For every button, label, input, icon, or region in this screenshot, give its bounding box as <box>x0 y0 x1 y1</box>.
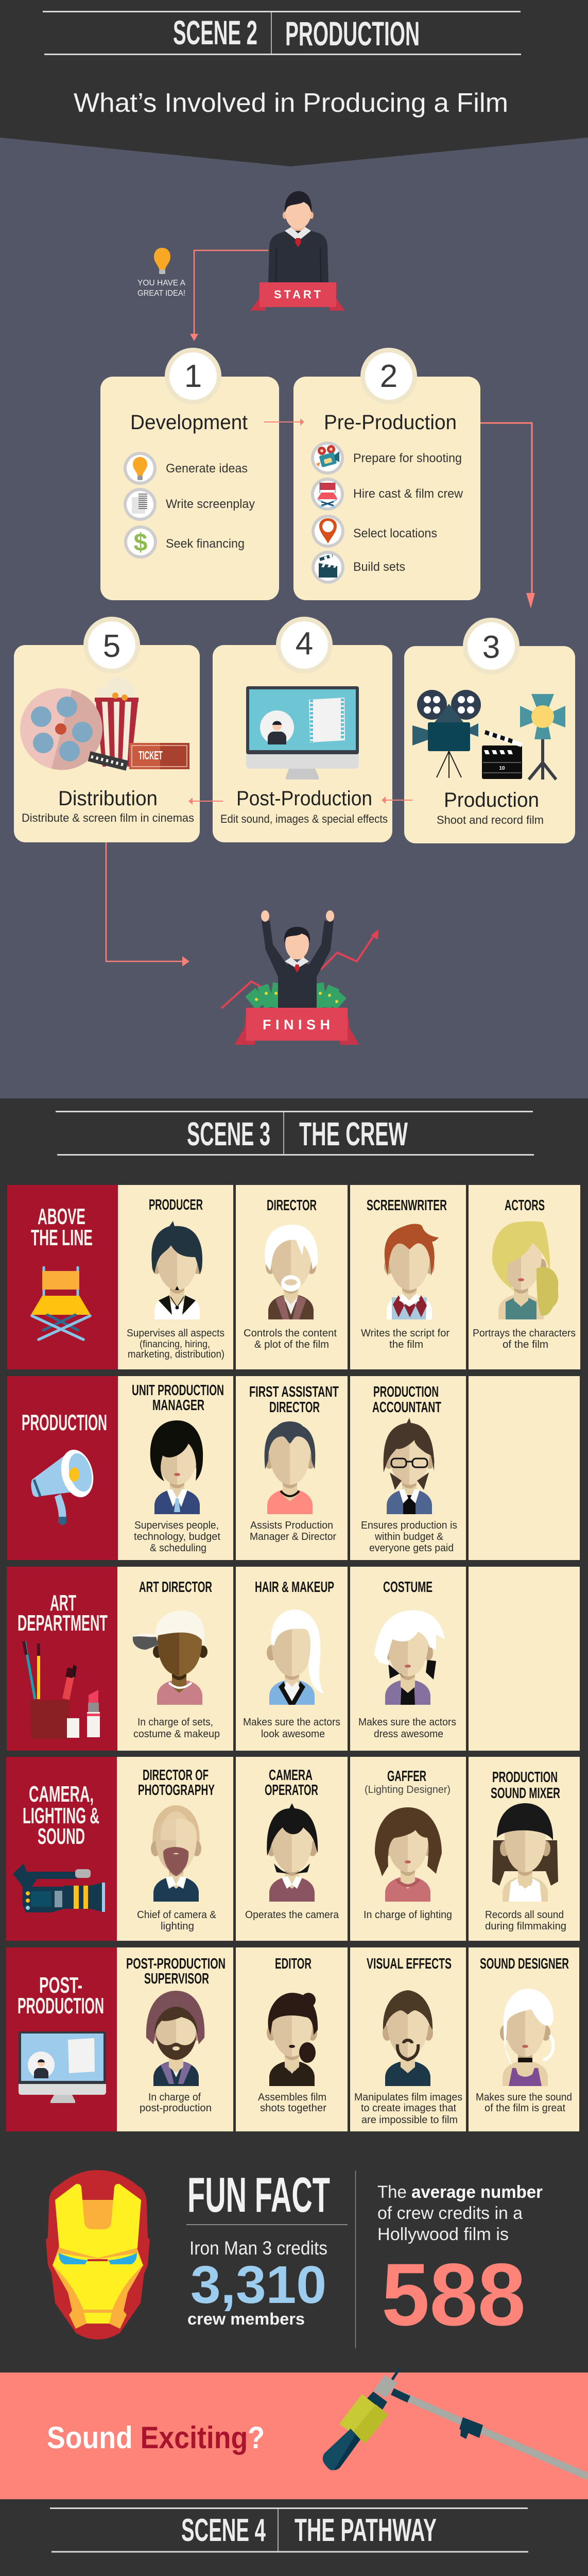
role: unit production manager: UNIT PRODUCTION <box>132 1382 224 1399</box>
role: first assistant director: FIRST ASSISTANT <box>249 1384 339 1400</box>
portrait: costume <box>374 1610 445 1705</box>
description: first assistant director: Manager & Director <box>250 1531 336 1543</box>
label: above the line <box>31 1204 93 1250</box>
heading: the pathway: THE PATHWAY <box>295 2513 437 2548</box>
icon: boom microphone <box>323 2368 588 2477</box>
description: director of photography: Chief of camera & <box>137 1909 217 1921</box>
description: unit production manager: & scheduling <box>150 1543 206 1554</box>
subtitle: What’s Involved in Producing a Film <box>74 88 508 118</box>
scene 4 title rules <box>50 2508 528 2552</box>
description: costume: dress awesome <box>374 1728 443 1740</box>
icon: generate ideas <box>124 452 157 485</box>
role: first assistant director <box>249 1384 339 1543</box>
portrait: camera operator <box>267 1803 318 1902</box>
heading: development: Development <box>130 411 248 434</box>
description: editor <box>258 2092 326 2114</box>
portrait: visual effects <box>383 1990 433 2086</box>
scene 2 title rules <box>43 11 521 55</box>
label: art department <box>18 1590 108 1636</box>
description: costume: Makes sure the actors <box>358 1717 456 1728</box>
role: post-production supervisor <box>126 1956 226 2114</box>
icon: director chair <box>311 478 344 511</box>
description: post-production supervisor: In charge of <box>148 2092 201 2103</box>
callout: great idea: GREAT IDEA! <box>137 289 185 298</box>
text: prepare for shooting: Prepare for shooting <box>353 451 462 465</box>
icon: clapperboard <box>312 551 344 584</box>
role: gaffer: (Lighting Designer) <box>365 1784 451 1795</box>
panel: fun fact <box>46 2167 543 2348</box>
text: average number: of crew credits in a <box>377 2204 523 2223</box>
portrait: producer <box>151 1221 202 1319</box>
icon: start person <box>268 191 328 282</box>
row: above the line <box>7 1185 580 1369</box>
role: actors <box>473 1197 576 1350</box>
text: average number: The average number <box>377 2182 543 2202</box>
panel: step 5 distribution <box>14 617 200 842</box>
role: camera operator <box>245 1767 339 1921</box>
description: production sound mixer: Records all sound <box>485 1909 564 1921</box>
portrait: sound designer <box>500 1989 554 2086</box>
icon: studio light <box>520 694 565 779</box>
portrait: unit production manager <box>150 1420 203 1514</box>
heading: scene 2: SCENE 2 <box>173 13 257 52</box>
text: build sets: Build sets <box>353 560 405 574</box>
description: director <box>244 1328 337 1350</box>
role: actors: ACTORS <box>505 1197 545 1214</box>
role: production accountant: PRODUCTION <box>373 1384 439 1400</box>
role: costume <box>358 1579 456 1740</box>
portrait: production sound mixer <box>492 1803 558 1902</box>
arrow: post-production to distribution <box>188 798 223 805</box>
portrait: screenwriter <box>384 1224 439 1319</box>
icon: film strip <box>88 751 128 771</box>
role: producer <box>127 1197 224 1360</box>
text: distribution description: Distribute & screen film in cinemas <box>22 811 194 824</box>
description: editor: shots together <box>260 2103 326 2114</box>
text: iron man 3 credits: Iron Man 3 credits <box>189 2238 327 2259</box>
role: editor: EDITOR <box>275 1956 312 1972</box>
description: hair and makeup: look awesome <box>261 1728 325 1740</box>
description: unit production manager <box>134 1520 220 1554</box>
description: sound designer <box>476 2092 572 2114</box>
label: above the line: THE LINE <box>31 1225 93 1250</box>
role: director of photography <box>137 1767 217 1932</box>
description: visual effects: to create images that <box>361 2103 456 2114</box>
text: select locations: Select locations <box>353 527 437 540</box>
role: production accountant <box>361 1384 457 1554</box>
icon: film projector <box>412 690 481 778</box>
icon: ticket <box>129 743 189 769</box>
role: editor <box>258 1956 326 2114</box>
description: director of photography: lighting <box>161 1921 194 1932</box>
text: generate ideas: Generate ideas <box>166 462 248 476</box>
role: director of photography: DIRECTOR OF <box>143 1767 209 1784</box>
row: production <box>7 1376 580 1560</box>
description: unit production manager: Supervises people, <box>134 1520 219 1531</box>
description: art director: costume & makeup <box>133 1728 220 1740</box>
icon: iron man helmet <box>46 2170 150 2340</box>
role: post-production supervisor: SUPERVISOR <box>144 1971 209 1987</box>
description: camera operator: Operates the camera <box>245 1909 339 1921</box>
label: art department: DEPARTMENT <box>18 1611 108 1636</box>
icon: video camera <box>13 1863 105 1912</box>
portrait: hair and makeup <box>267 1609 324 1705</box>
text: post-production description: Edit sound, images & special effects <box>220 812 388 825</box>
description: art director <box>133 1717 220 1740</box>
icon: write screenplay <box>124 488 157 521</box>
label: above the line: ABOVE <box>38 1204 85 1229</box>
number 4: 4 <box>296 626 313 662</box>
description: art director: In charge of sets, <box>137 1717 213 1728</box>
description: first assistant director <box>250 1520 336 1543</box>
heading: post-production: Post-Production <box>236 787 372 810</box>
description: hair and makeup <box>243 1717 340 1740</box>
text: average number: Hollywood film is <box>377 2225 509 2244</box>
role: art director: ART DIRECTOR <box>139 1579 212 1596</box>
callout: great idea <box>137 279 186 298</box>
description: director: & plot of the film <box>254 1339 329 1350</box>
role: costume: COSTUME <box>383 1579 433 1596</box>
divider <box>186 2224 348 2225</box>
heading: distribution: Distribution <box>58 787 158 810</box>
description: hair and makeup: Makes sure the actors <box>243 1717 340 1728</box>
heading: pre-production: Pre-Production <box>324 411 457 434</box>
icon: clapperboard: 10 <box>499 766 505 771</box>
heading: scene 3: SCENE 3 <box>187 1115 270 1153</box>
ribbon: finish: FINISH <box>263 1017 330 1032</box>
heading: scene 4: SCENE 4 <box>181 2513 266 2548</box>
description: production accountant: within budget & <box>374 1531 444 1543</box>
icon: editing monitor <box>19 2031 106 2103</box>
description: sound designer: of the film is great <box>485 2103 565 2114</box>
role: screenwriter: SCREENWRITER <box>367 1197 447 1214</box>
panel: step 4 post-production <box>213 617 392 842</box>
description: post-production supervisor: post-production <box>140 2103 212 2114</box>
description: producer: (financing, hiring, <box>140 1339 210 1350</box>
number 1: 1 <box>184 359 202 394</box>
role: producer: PRODUCER <box>149 1197 203 1213</box>
stat: 588: 588 <box>382 2245 526 2344</box>
label: post-production: PRODUCTION <box>18 1993 104 2019</box>
text: seek financing: Seek financing <box>166 537 245 551</box>
panel: step 2 pre-production <box>293 348 480 600</box>
description: director of photography <box>137 1909 217 1932</box>
role: visual effects: VISUAL EFFECTS <box>367 1956 452 1972</box>
portrait: gaffer <box>375 1807 442 1902</box>
arrow: production to post-production <box>382 796 412 804</box>
label: post-production <box>18 1973 104 2019</box>
portrait: art director <box>133 1611 207 1705</box>
scene 4 divider <box>278 2508 279 2552</box>
description: gaffer: In charge of lighting <box>364 1909 452 1921</box>
text: average number <box>377 2182 543 2244</box>
icon: seek financing <box>124 526 157 558</box>
role: director: DIRECTOR <box>267 1197 317 1214</box>
role: gaffer: GAFFER <box>387 1768 426 1785</box>
panel: scene 2 header <box>0 0 588 166</box>
description: first assistant director: Assists Production <box>250 1520 333 1531</box>
icon: lightbulb idea <box>154 248 170 274</box>
text: sound exciting: Sound Exciting? <box>47 2420 265 2455</box>
description: sound designer: Makes sure the sound <box>476 2092 572 2103</box>
description: actors <box>473 1328 576 1350</box>
description: production sound mixer <box>485 1909 566 1932</box>
panel: step 3 production <box>404 618 575 843</box>
role: hair and makeup: HAIR & MAKEUP <box>255 1579 334 1596</box>
heading: production: PRODUCTION <box>285 14 420 53</box>
icon: ticket: TICKET <box>139 749 163 762</box>
heading: production: Production <box>444 789 539 811</box>
icon: seek financing: $ <box>134 529 148 556</box>
description: actors: of the film <box>503 1339 548 1350</box>
panel: scene 4 header <box>0 2499 588 2576</box>
role: hair and makeup <box>243 1579 340 1740</box>
number 3: 3 <box>482 630 500 665</box>
role: director <box>244 1197 337 1350</box>
icon: director chair <box>31 1267 91 1340</box>
description: production accountant <box>361 1520 457 1554</box>
label: production: PRODUCTION <box>22 1410 107 1435</box>
text: write screenplay: Write screenplay <box>166 497 255 511</box>
icon: monitor <box>246 686 359 779</box>
role: screenwriter <box>361 1197 449 1350</box>
portrait: director <box>265 1225 318 1319</box>
role: unit production manager: MANAGER <box>152 1397 204 1414</box>
ribbon: start <box>250 282 345 311</box>
ribbon: finish <box>234 1008 359 1045</box>
role: post-production supervisor: POST-PRODUCTION <box>126 1956 226 1972</box>
icon: makeup <box>24 1641 100 1739</box>
arrow: start to development <box>190 250 268 341</box>
scene 2 divider <box>271 11 272 54</box>
arrow: distribution to finish <box>106 842 189 967</box>
role: camera operator: OPERATOR <box>265 1782 318 1799</box>
description: screenwriter: the film <box>389 1339 423 1350</box>
icon: film camera <box>311 442 344 474</box>
icon: megaphone <box>31 1446 98 1525</box>
role: production accountant: ACCOUNTANT <box>372 1399 441 1416</box>
description: unit production manager: technology, budget <box>134 1531 220 1543</box>
description: producer: marketing, distribution) <box>128 1349 224 1360</box>
heading: fun fact: FUN FACT <box>187 2167 330 2223</box>
role: gaffer <box>364 1768 452 1921</box>
row: post-production <box>6 1947 579 2131</box>
role: unit production manager <box>132 1382 224 1554</box>
arrow: development to pre-production <box>264 418 304 426</box>
label: post-production: POST- <box>39 1973 82 1998</box>
stat: 3310: 3,310 <box>191 2255 326 2314</box>
portrait: production accountant <box>384 1418 435 1514</box>
number 2: 2 <box>380 359 397 394</box>
description: post-production supervisor <box>140 2092 212 2114</box>
divider <box>355 2171 356 2348</box>
description: producer: Supervises all aspects <box>127 1328 224 1339</box>
label: camera lighting and sound: SOUND <box>38 1824 85 1849</box>
ribbon: start: START <box>274 288 321 301</box>
text: crew members: crew members <box>187 2310 305 2328</box>
row: camera lighting and sound <box>6 1757 580 1941</box>
icon: finish person with rising chart <box>221 910 378 1010</box>
role: art director <box>133 1579 220 1740</box>
scene 3 divider <box>283 1111 284 1155</box>
text: hire cast: Hire cast & film crew <box>353 487 463 501</box>
row: art department <box>7 1567 580 1751</box>
description: production sound mixer: during filmmaking <box>485 1921 566 1932</box>
panel: scene 3 crew <box>0 1098 588 2372</box>
description: actors: Portrays the characters <box>473 1328 576 1339</box>
description: costume <box>358 1717 456 1740</box>
description: screenwriter: Writes the script for <box>361 1328 449 1339</box>
role: camera operator: CAMERA <box>269 1767 313 1784</box>
description: visual effects: are impossible to film <box>361 2114 458 2126</box>
role: first assistant director: DIRECTOR <box>269 1399 320 1416</box>
description: screenwriter <box>361 1328 449 1350</box>
description: director: Controls the content <box>244 1328 337 1339</box>
label: art department: ART <box>50 1590 76 1616</box>
portrait: director of photography <box>151 1805 201 1902</box>
portrait: first assistant director <box>265 1421 315 1514</box>
role: visual effects <box>354 1956 462 2126</box>
number 5: 5 <box>103 629 120 664</box>
label: camera lighting and sound: LIGHTING & <box>23 1803 99 1828</box>
portrait: post-production supervisor <box>146 1991 204 2086</box>
text: production description: Shoot and record film <box>437 814 544 826</box>
icon: film reel <box>20 688 102 770</box>
arrow: pre-production to production <box>480 423 535 608</box>
icon: clapperboard <box>482 730 522 779</box>
icon: popcorn <box>95 677 139 767</box>
description: production accountant: Ensures production is <box>361 1520 457 1531</box>
label: camera lighting and sound <box>23 1782 99 1849</box>
portrait: editor <box>267 1993 318 2086</box>
callout: great idea: YOU HAVE A <box>137 279 186 287</box>
role: production sound mixer <box>485 1769 566 1932</box>
icon: location pin <box>312 515 344 548</box>
heading: the crew: THE CREW <box>299 1115 408 1153</box>
label: camera lighting and sound: CAMERA, <box>29 1782 94 1807</box>
description: visual effects: Manipulates film images <box>354 2092 462 2103</box>
role: sound designer <box>476 1956 572 2114</box>
description: producer <box>127 1328 224 1360</box>
panel: step 1 development <box>100 348 279 600</box>
description: editor: Assembles film <box>258 2092 326 2103</box>
description: visual effects <box>354 2092 462 2126</box>
portrait: actor <box>492 1221 558 1319</box>
role: director of photography: PHOTOGRAPHY <box>138 1782 215 1799</box>
scene 3 title rules <box>56 1112 534 1155</box>
panel: sound exciting banner <box>0 2368 588 2499</box>
description: production accountant: everyone gets paid <box>369 1543 454 1554</box>
